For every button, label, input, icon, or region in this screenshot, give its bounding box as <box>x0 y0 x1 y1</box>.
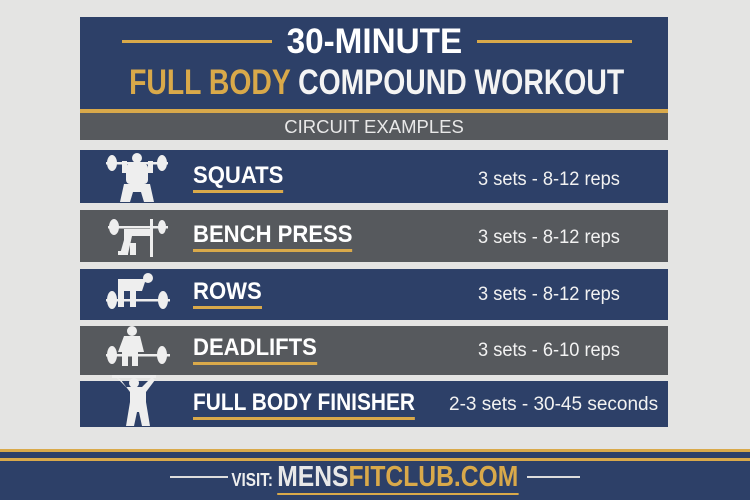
row: deadlifts <box>80 326 668 375</box>
icon: deadlift <box>106 326 170 366</box>
exercise name: ROWS <box>193 278 262 305</box>
exercise name: SQUATS <box>193 162 283 189</box>
exercise name: FULL BODY FINISHER <box>193 389 415 416</box>
icon: overhead <box>112 375 156 426</box>
subtitle band <box>80 113 668 140</box>
row: squats <box>80 150 668 203</box>
icon: bench <box>108 219 168 257</box>
exercise name: DEADLIFTS <box>193 334 317 361</box>
subtitle band: CIRCUIT EXAMPLES <box>284 116 464 137</box>
title line 1: 30-MINUTE <box>286 22 462 61</box>
footer text: VISIT: MENSFITCLUB.COM <box>232 461 518 493</box>
title line 1 <box>122 22 632 61</box>
stat: 3 sets - 8-12 reps <box>478 169 620 190</box>
footer <box>0 449 750 500</box>
exercise name: BENCH PRESS <box>193 221 353 248</box>
row: bench press <box>80 210 668 262</box>
icon: row <box>106 273 170 309</box>
stat: 2-3 sets - 30-45 seconds <box>449 394 658 415</box>
icon: squat <box>106 153 168 202</box>
row: rows <box>80 269 668 320</box>
header panel <box>80 17 668 113</box>
stat: 3 sets - 6-10 reps <box>478 340 620 361</box>
stat: 3 sets - 8-12 reps <box>478 284 620 305</box>
title line 2: FULL BODY COMPOUND WORKOUT <box>129 63 624 102</box>
stat: 3 sets - 8-12 reps <box>478 227 620 248</box>
row: full body finisher <box>80 381 668 427</box>
